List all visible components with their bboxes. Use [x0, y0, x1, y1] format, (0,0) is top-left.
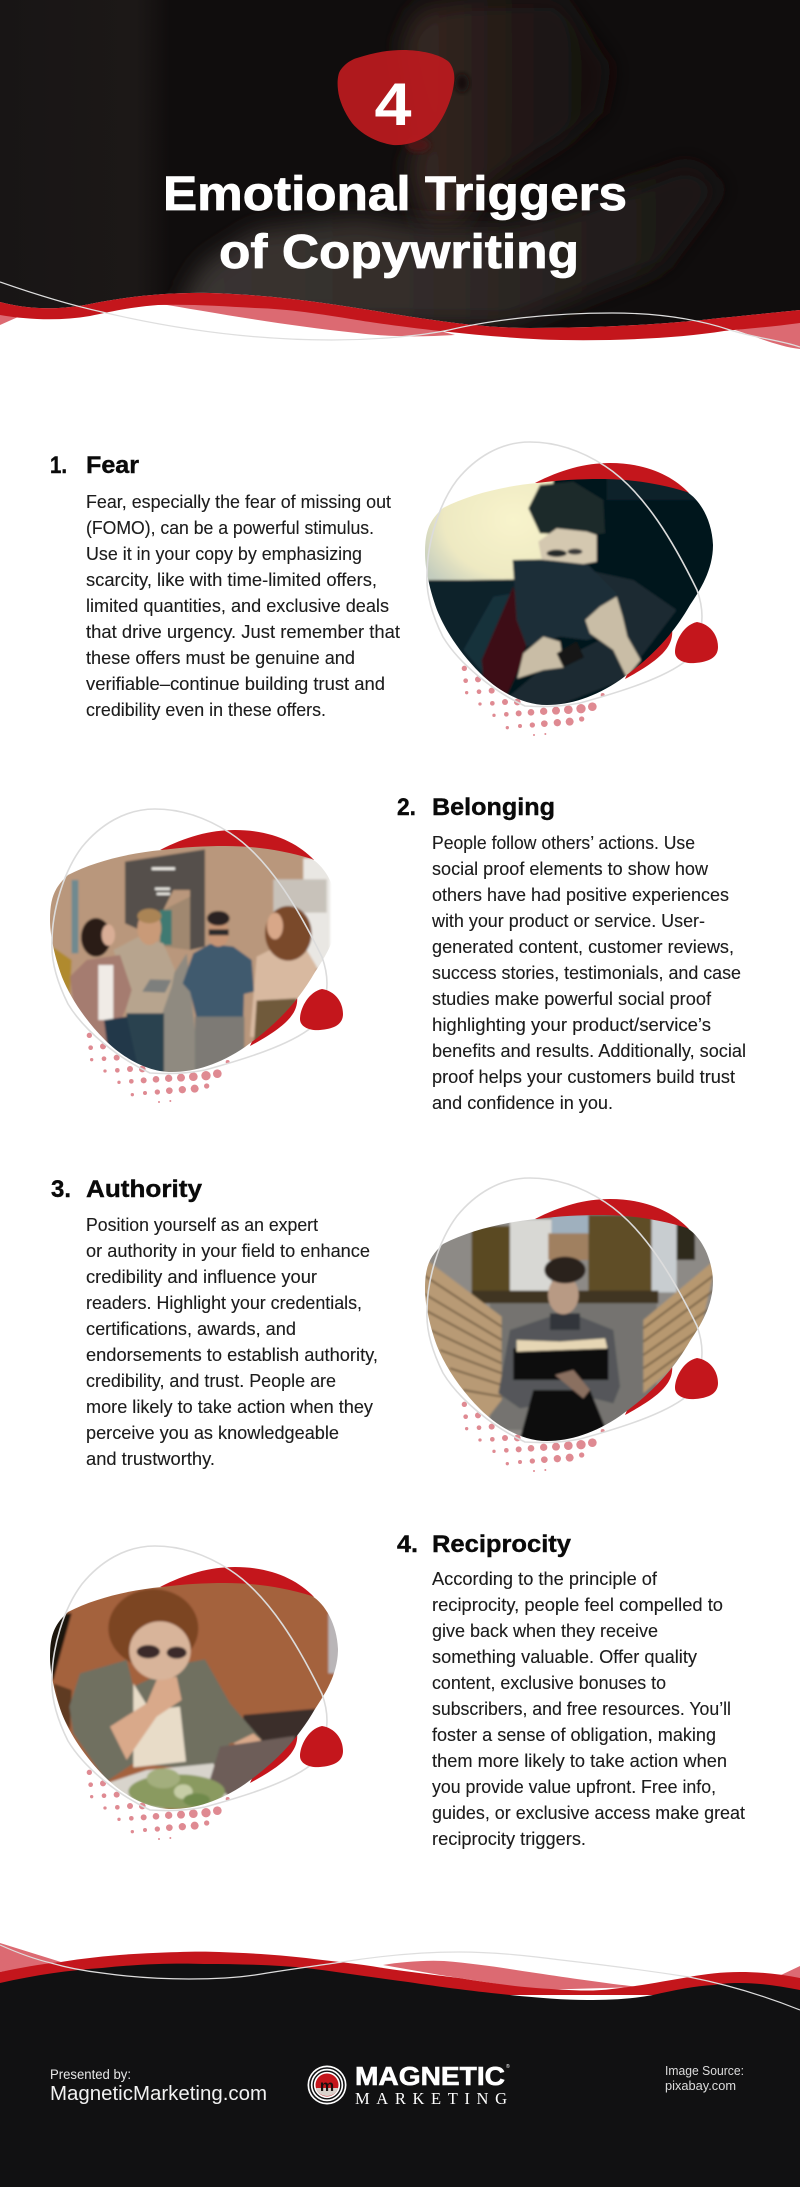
section 1: Fear text: credibility even in these offers. — [86, 700, 326, 720]
section 4: Reciprocity text: foster a sense of obligation, making — [432, 1725, 716, 1745]
title — [163, 168, 627, 279]
section 4: Reciprocity text: give back when they receive — [432, 1621, 658, 1641]
section 4: Reciprocity text: reciprocity, people feel compelled to — [432, 1595, 723, 1615]
section 4: Reciprocity text: reciprocity triggers. — [432, 1829, 586, 1849]
section 3: Authority text: Position yourself as an expert — [86, 1215, 318, 1235]
presented by — [50, 2067, 267, 2105]
section 1: Fear text: Use it in your copy by emphasizing — [86, 544, 362, 564]
section 2: Belonging text: People follow others’ actions. Use — [432, 833, 695, 853]
section 4: Reciprocity text: According to the principle of — [432, 1569, 658, 1589]
section 2: Belonging text: with your product or service. User- — [431, 911, 705, 931]
logo: magnetic marketing — [308, 2061, 510, 2108]
footer wave — [0, 1943, 800, 2187]
title: Emotional Triggers — [163, 168, 627, 221]
section 2: Belonging text: and confidence in you. — [432, 1093, 613, 1113]
section 3: Authority text: readers. Highlight your credentials, — [86, 1293, 362, 1313]
section 1: Fear text: Fear — [86, 452, 139, 479]
section 4: Reciprocity text: 4. — [397, 1531, 418, 1558]
section 2: Belonging image — [47, 809, 343, 1103]
section 3: Authority text: 3. — [51, 1176, 71, 1203]
section 4: Reciprocity text: subscribers, and free resources. You’ll — [432, 1699, 731, 1719]
section 4: Reciprocity text: them more likely to take action when — [432, 1751, 727, 1771]
section 3: Authority text: or authority in your field to enhance — [86, 1241, 370, 1261]
section 4: Reciprocity text: you provide value upfront. Free info, — [432, 1777, 716, 1797]
section 3: Authority text: credibility, and trust. People are — [86, 1371, 336, 1391]
section 4: Reciprocity text: something valuable. Offer quality — [432, 1647, 697, 1667]
header photo background — [0, 0, 800, 345]
section 3: Authority text: certifications, awards, and — [86, 1319, 296, 1339]
section 3: Authority text: endorsements to establish authority, — [86, 1345, 378, 1365]
section 1: Fear text: (FOMO), can be a powerful stimulus. — [86, 518, 374, 538]
image source: pixabay.com — [665, 2078, 736, 2093]
presented by: Presented by: — [50, 2067, 131, 2082]
logo: magnetic marketing: ® — [506, 2063, 510, 2070]
section 1: Fear text: 1. — [50, 452, 67, 479]
presented by: MagneticMarketing.com — [50, 2083, 267, 2105]
image source: Image Source: — [665, 2063, 744, 2078]
section 3: Authority text: and trustworthy. — [86, 1449, 215, 1469]
section 1: Fear text: scarcity, like with time-limited offers, — [86, 570, 377, 590]
section 4: Reciprocity text: guides, or exclusive access make great — [432, 1803, 745, 1823]
section 3: Authority text: credibility and influence your — [86, 1267, 317, 1287]
section 2: Belonging text: studies make powerful social proof — [432, 989, 712, 1009]
section 1: Fear text: limited quantities, and exclusive deals — [86, 596, 389, 616]
section 2: Belonging text: benefits and results. Additionally, social — [432, 1041, 746, 1061]
section 1: Fear text: verifiable–continue building trust and — [86, 674, 385, 694]
section 4: Reciprocity image — [47, 1546, 347, 1840]
section 2: Belonging text: Belonging — [432, 794, 555, 821]
number badge: 4 — [374, 71, 412, 138]
header wave — [0, 282, 800, 360]
section 3: Authority text: perceive you as knowledgeable — [86, 1423, 339, 1443]
logo: magnetic marketing: MAGNETIC — [355, 2061, 505, 2091]
section 4: Reciprocity text — [397, 1531, 745, 1849]
title: of Copywriting — [219, 226, 579, 279]
image source — [665, 2063, 744, 2093]
section 2: Belonging text: others have had positive experiences — [432, 885, 729, 905]
section 2: Belonging text: success stories, testimonials, and case — [432, 963, 741, 983]
section 1: Fear text: Fear, especially the fear of missing out — [86, 492, 391, 512]
number badge — [338, 50, 454, 145]
section 3: Authority image — [417, 1178, 723, 1472]
logo: magnetic marketing: m — [320, 2078, 334, 2095]
logo: magnetic marketing: MARKETING — [355, 2089, 507, 2108]
section 1: Fear image — [420, 442, 720, 736]
section 2: Belonging text: social proof elements to show how — [432, 859, 709, 879]
section 3: Authority text: more likely to take action when they — [86, 1397, 373, 1417]
section 2: Belonging text — [397, 794, 746, 1113]
section 4: Reciprocity text: content, exclusive bonuses to — [432, 1673, 666, 1693]
section 1: Fear text: that drive urgency. Just remember that — [86, 622, 400, 642]
section 2: Belonging text: generated content, customer reviews, — [432, 937, 734, 957]
section 1: Fear text: these offers must be genuine and — [86, 648, 355, 668]
section 2: Belonging text: 2. — [397, 794, 416, 821]
section 4: Reciprocity text: Reciprocity — [432, 1531, 572, 1558]
section 3: Authority text: Authority — [86, 1176, 203, 1203]
section 2: Belonging text: proof helps your customers build trust — [432, 1067, 735, 1087]
section 3: Authority text — [51, 1176, 378, 1469]
section 1: Fear text — [50, 452, 400, 720]
section 2: Belonging text: highlighting your product/service’s — [432, 1015, 711, 1035]
